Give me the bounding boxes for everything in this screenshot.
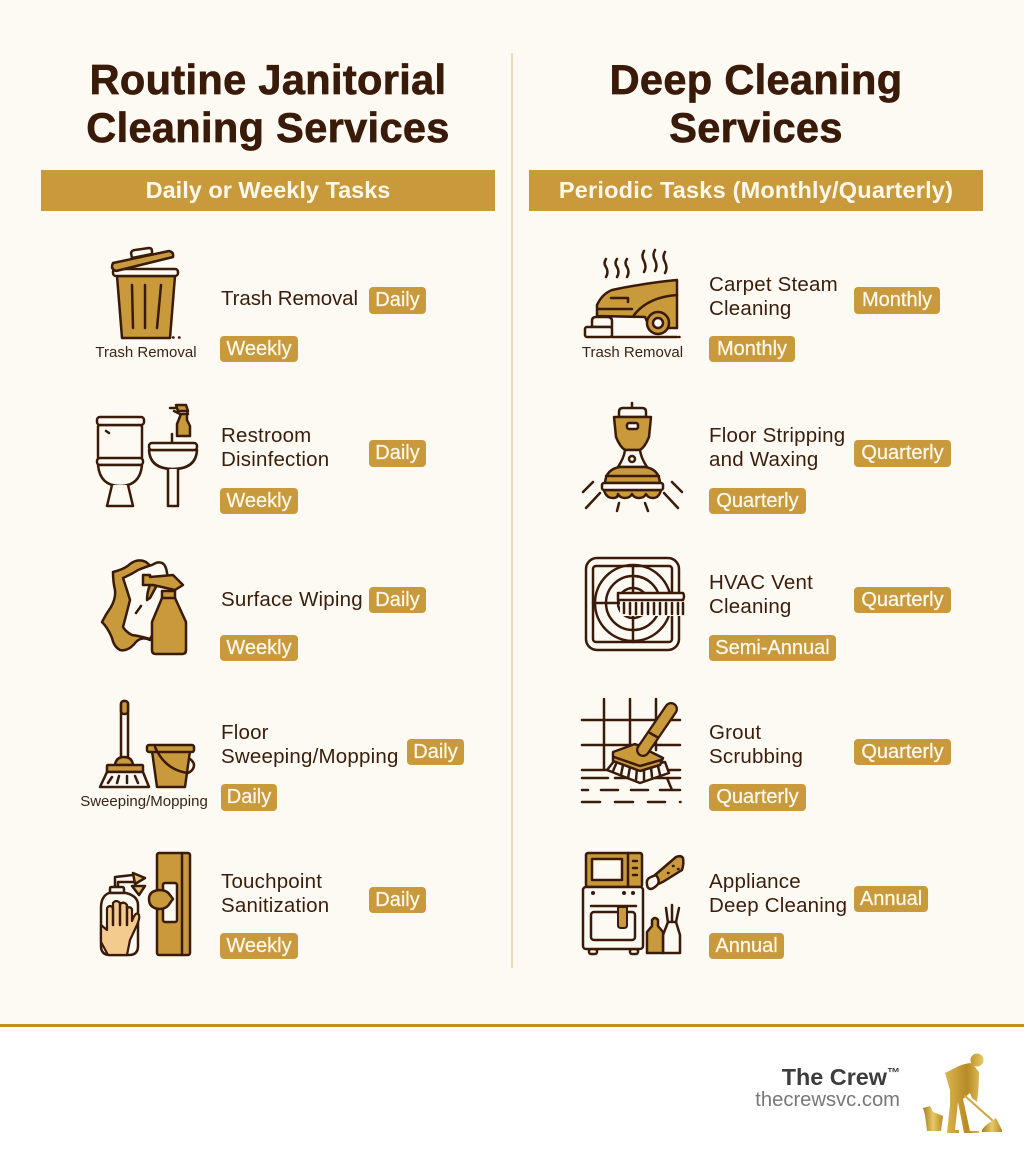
- frequency tag: [221, 784, 277, 811]
- task name: Grout: [709, 721, 761, 744]
- heading: routine janitorial: Cleaning Services: [86, 104, 450, 151]
- task name: Trash Removal: [221, 287, 358, 310]
- task name: Sanitization: [221, 894, 329, 917]
- icon: trash can: [110, 246, 181, 340]
- frequency tag: Daily: [227, 786, 271, 808]
- task name: HVAC Vent: [709, 571, 813, 594]
- task name: [709, 424, 845, 471]
- row: touchpoint sanitization: [100, 852, 426, 959]
- task name: and Waxing: [709, 448, 818, 471]
- task name: Disinfection: [221, 448, 329, 471]
- icon: scrub brush on tiles: [580, 698, 682, 804]
- footer: [0, 1024, 1024, 1154]
- icon: carpet steam machine: [584, 248, 681, 338]
- heading: deep cleaning: Deep Cleaning: [610, 56, 902, 103]
- icon caption: Sweeping/Mopping: [80, 793, 208, 810]
- banner: daily or weekly tasks: Daily or Weekly Tasks: [146, 177, 390, 203]
- task name: [221, 424, 329, 471]
- frequency tag: Daily: [375, 289, 420, 311]
- task name: Cleaning: [709, 595, 792, 618]
- task name: Appliance: [709, 870, 801, 893]
- task name: Scrubbing: [709, 745, 803, 768]
- frequency tag: [407, 739, 464, 765]
- icon: cloth and spray bottle: [100, 559, 188, 656]
- frequency tag: [369, 287, 426, 314]
- heading: deep cleaning: [610, 56, 902, 151]
- frequency tag: Annual: [715, 935, 778, 957]
- frequency tag: [369, 887, 426, 913]
- frequency tag: Quarterly: [861, 589, 944, 611]
- task name: Cleaning: [709, 297, 792, 320]
- frequency tag: Quarterly: [861, 442, 944, 464]
- row: trash removal: [95, 246, 426, 362]
- row: carpet steam cleaning: [582, 248, 940, 362]
- frequency tag: Monthly: [717, 338, 787, 360]
- task name: [221, 721, 399, 768]
- row: restroom disinfection: [96, 404, 426, 514]
- row: grout scrubbing: [580, 698, 951, 811]
- banner: daily or weekly tasks: [41, 170, 495, 211]
- task name: Restroom: [221, 424, 311, 447]
- frequency tag: Annual: [860, 888, 922, 910]
- frequency tag: Semi-Annual: [715, 637, 830, 659]
- row: appliance deep cleaning: [582, 852, 928, 959]
- frequency tag: [709, 784, 806, 811]
- banner: periodic tasks: Periodic Tasks (Monthly/Quarterly): [559, 177, 953, 203]
- frequency tag: Quarterly: [716, 786, 799, 808]
- icon: toilet and sink: [96, 404, 198, 508]
- task name: Floor Stripping: [709, 424, 845, 447]
- row: hvac vent cleaning: [584, 556, 951, 661]
- task name: Sweeping/Mopping: [221, 745, 399, 768]
- heading: routine janitorial: [86, 56, 450, 151]
- task name: [709, 870, 847, 917]
- icon caption: Trash Removal: [582, 344, 683, 361]
- frequency tag: [369, 440, 426, 467]
- frequency tag: [369, 587, 426, 613]
- frequency tag: Weekly: [226, 935, 292, 957]
- task name: [709, 721, 803, 768]
- logo: gold cleaner silhouette: [923, 1054, 1002, 1133]
- frequency tag: [854, 287, 940, 314]
- frequency tag: Quarterly: [716, 490, 799, 512]
- task name: Surface Wiping: [221, 588, 363, 611]
- website: thecrewsvc.com: [755, 1089, 900, 1111]
- panel: deep cleaning tasks: [580, 248, 951, 959]
- brand name: The Crew™: [782, 1064, 900, 1090]
- frequency tag: Quarterly: [861, 741, 944, 763]
- heading: deep cleaning: Services: [669, 104, 843, 151]
- frequency tag: Weekly: [226, 338, 292, 360]
- frequency tag: Weekly: [226, 637, 292, 659]
- frequency tag: Daily: [375, 889, 420, 911]
- panel: routine tasks: [80, 246, 464, 959]
- frequency tag: Daily: [413, 741, 458, 763]
- icon: broom and bucket: [98, 700, 196, 788]
- frequency tag: Weekly: [226, 490, 292, 512]
- task name: [709, 273, 838, 320]
- task name: [221, 870, 329, 917]
- frequency tag: Monthly: [862, 289, 932, 311]
- heading: routine janitorial: Routine Janitorial: [90, 56, 446, 103]
- task name: Touchpoint: [221, 870, 322, 893]
- icon: floor buffing machine: [582, 402, 684, 512]
- task name: Carpet Steam: [709, 273, 838, 296]
- task name: Floor: [221, 721, 269, 744]
- icon: hand soap and door handle: [100, 852, 192, 956]
- row: surface wiping: [100, 559, 426, 661]
- icon: oven microwave and cleaners: [582, 852, 685, 956]
- banner: periodic tasks: [529, 170, 983, 211]
- vertical divider: [511, 53, 513, 968]
- frequency tag: Daily: [375, 442, 420, 464]
- icon caption: Trash Removal: [95, 344, 197, 361]
- icon: vent and brush: [584, 556, 686, 652]
- row: floor stripping and waxing: [582, 402, 951, 514]
- frequency tag: Daily: [375, 589, 420, 611]
- frequency tag: [709, 336, 795, 362]
- task name: Deep Cleaning: [709, 894, 847, 917]
- task name: [709, 571, 813, 618]
- row: floor sweeping and mopping: [80, 700, 464, 811]
- frequency tag: [854, 440, 951, 467]
